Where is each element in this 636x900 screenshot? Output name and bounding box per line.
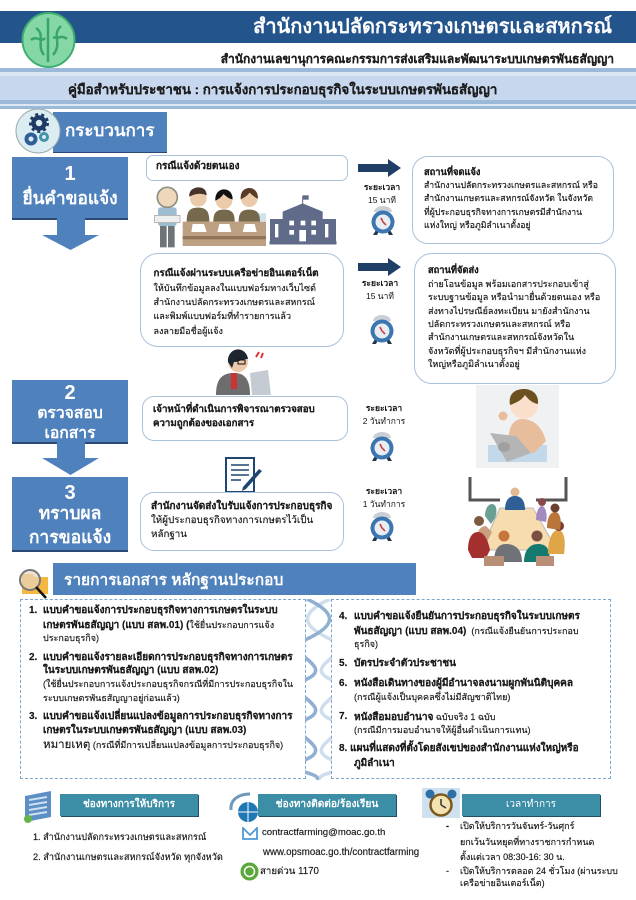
- duration 4: [363, 486, 405, 508]
- panel: documents right: พันธสัญญา (แบบ สลพ.04) (กรณีแจ้งยืนยันการประกอบ: [354, 626, 579, 637]
- icon: clock 2: [370, 315, 394, 344]
- box: online notification: [140, 253, 344, 347]
- service channels heading: ช่องทางการให้บริการ: [83, 799, 175, 810]
- duration 3: ระยะเวลา: [366, 403, 402, 413]
- decorative DNA strip: [305, 599, 332, 780]
- manual title band: [0, 68, 636, 109]
- panel: documents left: ระบบเกษตรพันธสัญญาอยู่ก่อนแล้ว): [43, 693, 180, 703]
- subtitle: สำนักงานเลขานุการคณะกรรมการส่งเสริมและพัฒนาระบบเกษตรพันธสัญญา: [221, 52, 614, 66]
- box: delivery place: ระบบฐานข้อมูล หรือนำมายื่นด้วยตนเอง หรือ: [428, 292, 600, 302]
- box: receipt: สำนักงานจัดส่งใบรับแจ้งการประกอบธุรกิจ: [151, 501, 332, 512]
- illustration: woman with laptop: [476, 385, 559, 468]
- step 3: 3: [64, 482, 76, 504]
- panel: documents left: 3.: [29, 711, 37, 722]
- working hours text: เปิดให้บริการวันจันทร์-วันศุกร์: [460, 821, 574, 831]
- logo: [22, 12, 76, 68]
- box: document check: เจ้าหน้าที่ดำเนินการพิจารณาตรวจสอบ: [153, 404, 315, 414]
- icon: clock 1: [372, 206, 394, 235]
- panel: documents right: 6.: [339, 678, 347, 689]
- step 2: [12, 380, 128, 475]
- icon: globe: [229, 792, 258, 822]
- working hours text: -: [446, 821, 449, 831]
- icon: building: [24, 791, 51, 823]
- duration 4: 1 วันทำการ: [363, 498, 405, 508]
- step 1: [12, 157, 128, 250]
- working hours text: ยกเว้นวันหยุดที่ทางราชการกำหนด: [460, 837, 594, 847]
- box: delivery place: จังหวัดที่ผู้ประกอบธุรกิจฯ มีสำนักงานแห่ง: [428, 346, 586, 356]
- icon: folder with magnifier: [19, 569, 48, 599]
- box: online notification: กรณีแจ้งผ่านระบบเครือข่ายอินเตอร์เน็ต: [154, 268, 318, 279]
- process heading tab: กระบวนการ: [65, 121, 154, 140]
- duration 4: ระยะเวลา: [366, 486, 402, 496]
- box: delivery place: [414, 253, 616, 384]
- process heading tab: [53, 112, 167, 152]
- working hours text: ตั้งแต่เวลา 08:30-16: 30 น.: [460, 852, 565, 862]
- step 3: ทราบผล: [39, 503, 101, 523]
- panel: documents right: ภูมิลำเนา: [354, 758, 395, 769]
- working hours heading: [462, 794, 600, 816]
- icon: clock 4: [370, 512, 394, 541]
- box: online notification: ให้บันทึกข้อมูลลงในแบบฟอร์มทางเว็บไซต์: [154, 283, 316, 293]
- box: notification place: สถานที่จดแจ้ง: [424, 167, 480, 177]
- step 1: 1: [64, 163, 76, 185]
- panel: documents left: 1.: [29, 605, 37, 616]
- title: สำนักงานปลัดกระทรวงเกษตรและสหกรณ์: [253, 16, 612, 38]
- panel: documents left: เกษตรในระบบเกษตรพันธสัญญา (แบบ สลพ.03): [43, 725, 246, 736]
- panel: documents left: เกษตรพันธสัญญา (แบบ สลพ.01) (ใช้ยื่นประกอบการแจ้ง: [43, 620, 274, 631]
- box: online notification: ลงลายมือชื่อผู้แจ้ง: [154, 326, 223, 336]
- box: notification place: สำนักงานปลัดกระทรวงเกษตรและสหกรณ์ หรือ: [424, 180, 598, 190]
- panel: documents left: แบบคำขอแจ้งรายละเอียดการประกอบธุรกิจทางการเกษตร: [43, 652, 293, 663]
- working hours text: -: [446, 866, 449, 876]
- manual title: คู่มือสำหรับประชาชน : การแจ้งการประกอบธุรกิจในระบบเกษตรพันธสัญญา: [68, 82, 497, 97]
- working hours text: เครือข่ายอินเตอร์เน็ต): [460, 878, 545, 888]
- panel: documents right: 4.: [339, 611, 347, 622]
- panel: documents right: 8. แผนที่แสดงที่ตั้งโดยสังเขปของสำนักงานแห่งใหญ่หรือ: [339, 743, 579, 754]
- box: receipt: หลักฐาน: [151, 528, 187, 540]
- box: self notification: กรณีแจ้งด้วยตนเอง: [156, 161, 240, 172]
- box: online notification: สำนักงานปลัดกระทรวงเกษตรและสหกรณ์: [154, 297, 315, 307]
- panel: documents right: หนังสือเดินทางของผู้มีอำนาจลงนามผูกพันนิติบุคคล: [354, 678, 573, 689]
- panel: documents right: 5.: [339, 658, 347, 669]
- box: receipt: [140, 492, 344, 551]
- panel: documents right: แบบคำขอแจ้งยืนยันการประกอบธุรกิจในระบบเกษตร: [354, 611, 580, 622]
- illustration: officer with laptop: [216, 349, 271, 395]
- panel: documents left: [20, 599, 306, 779]
- illustration: meeting table: [468, 477, 568, 566]
- arrow 2: [358, 258, 401, 276]
- panel: documents right: 7.: [339, 711, 347, 722]
- contact heading: ช่องทางติดต่อ/ร้องเรียน: [276, 799, 378, 810]
- panel: documents left: ประกอบธุรกิจ): [43, 633, 99, 643]
- step 2: ตรวจสอบ: [37, 405, 103, 422]
- box: delivery place: สำนักงานเกษตรและสหกรณ์จังหวัดใน: [428, 332, 574, 342]
- icon: gears: [16, 108, 60, 154]
- service channels heading: [60, 794, 198, 816]
- box: document check: ความถูกต้องของเอกสาร: [153, 418, 254, 428]
- box: delivery place: ถ่ายโอนข้อมูล พร้อมเอกสารประกอบเข้าสู่: [428, 279, 589, 289]
- panel: documents right: หนังสือมอบอำนาจ ฉบับจริง 1 ฉบับ: [354, 712, 495, 723]
- box: notification place: สำนักงานเกษตรและสหกรณ์จังหวัด ในจังหวัด: [424, 193, 593, 203]
- working hours text: [446, 820, 618, 888]
- box: receipt: ให้ผู้ประกอบธุรกิจทางการเกษตรไว้เป็น: [151, 514, 313, 526]
- box: delivery place: ใหญ่หรือภูมิลำเนาตั้งอยู่: [428, 359, 520, 369]
- icon: clock 3: [370, 432, 394, 461]
- panel: documents left: แบบคำขอแจ้งการประกอบธุรกิจทางการเกษตรในระบบ: [43, 605, 278, 616]
- illustration: officials at desk and building: [154, 186, 336, 248]
- step 3: [12, 477, 128, 552]
- panel: documents left: หมายเหตุ (กรณีที่มีการเปลี่ยนแปลงข้อมูลการประกอบธุรกิจ): [43, 739, 283, 751]
- step 1: ยื่นคำขอแจ้ง: [22, 188, 118, 208]
- box: delivery place: สถานที่จัดส่ง: [428, 265, 479, 275]
- service channels list: [33, 832, 223, 863]
- duration 1: [364, 182, 400, 204]
- panel: documents right: (กรณีผู้แจ้งเป็นบุคคลซึ่งไม่มีสัญชาติไทย): [354, 692, 510, 702]
- duration 3: [363, 403, 405, 426]
- box: notification place: [412, 156, 614, 244]
- icon: mail: [242, 827, 258, 840]
- duration 2: [362, 278, 398, 300]
- hotline: สายด่วน 1170: [260, 866, 319, 877]
- box: online notification: และพิมพ์แบบฟอร์มที่ทำรายการแล้ว: [154, 311, 291, 321]
- step 3: การขอแจ้ง: [29, 527, 111, 547]
- panel: documents right: [331, 599, 611, 779]
- website: www.opsmoac.go.th/contractfarming: [263, 847, 419, 858]
- panel: documents right: (กรณีมีการมอบอำนาจให้ผู้อื่นดำเนินการแทน): [354, 725, 531, 735]
- panel: documents left: ในระบบเกษตรพันธสัญญา (แบบ สลพ.02): [43, 665, 218, 676]
- documents heading: [53, 563, 416, 595]
- illustration: document and pen: [225, 457, 262, 492]
- panel: documents left: (ใช้ยื่นประกอบการแจ้งประกอบธุรกิจกรณีที่มีการประกอบธุรกิจใน: [43, 679, 293, 689]
- working hours text: เปิดให้บริการตลอด 24 ชั่วโมง (ผ่านระบบ: [460, 866, 618, 876]
- panel: documents left: 2.: [29, 652, 37, 663]
- box: document check: [142, 396, 348, 441]
- step 2: เอกสาร: [44, 425, 96, 442]
- duration 1: ระยะเวลา: [364, 182, 400, 192]
- icon: phone: [240, 862, 258, 880]
- panel: documents right: ธุรกิจ): [354, 639, 378, 649]
- panel: documents right: บัตรประจำตัวประชาชน: [354, 658, 456, 669]
- box: notification place: ที่ผู้ประกอบธุรกิจทางการเกษตรมีสำนักงาน: [424, 207, 582, 217]
- icon: alarm clock: [422, 788, 460, 818]
- service channels list: 2. สำนักงานเกษตรและสหกรณ์จังหวัด ทุกจังหวัด: [33, 852, 223, 862]
- step 2: 2: [64, 382, 76, 404]
- duration 2: ระยะเวลา: [362, 278, 398, 288]
- working hours heading: เวลาทำการ: [506, 799, 556, 810]
- email: contractfarming@moac.go.th: [262, 827, 385, 838]
- documents heading: รายการเอกสาร หลักฐานประกอบ: [64, 572, 283, 589]
- service channels list: 1. สำนักงานปลัดกระทรวงเกษตรและสหกรณ์: [33, 832, 206, 842]
- arrow 1: [358, 159, 401, 177]
- box: delivery place: ปลัดกระทรวงเกษตรและสหกรณ์ หรือ: [428, 319, 570, 329]
- duration 1: 15 นาที: [368, 194, 396, 204]
- box: notification place: แห่งใหญ่ หรือภูมิลำเนาตั้งอยู่: [424, 220, 531, 230]
- duration 3: 2 วันทำการ: [363, 416, 405, 426]
- panel: documents left: แบบคำขอแจ้งเปลี่ยนแปลงข้อมูลการประกอบธุรกิจทางการ: [43, 711, 292, 722]
- duration 2: 15 นาที: [366, 290, 394, 300]
- box: delivery place: ส่งทางไปรษณีย์ลงทะเบียน มายังสำนักงาน: [428, 306, 590, 316]
- contact heading: [258, 794, 396, 816]
- box: self notification: [146, 155, 348, 181]
- header band: [0, 11, 636, 43]
